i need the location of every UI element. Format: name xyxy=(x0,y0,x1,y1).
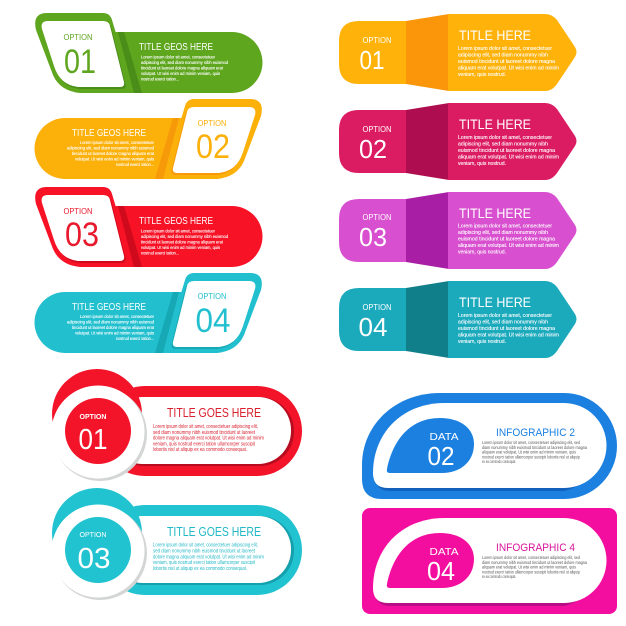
red band inner shadow xyxy=(110,397,294,466)
cyan title and text: Lorem ipsum dolor sit amet, consectetuer adipiscing elit, xyxy=(153,543,258,549)
pink body text: diam nonummy nibh euismod tincidunt ut laoreet dolore magna xyxy=(482,560,587,565)
red title and text: volutpat. Ut wisi enim ad minim veniam, quis xyxy=(141,245,221,250)
pink frame xyxy=(362,508,617,614)
blue body text: ex ea commodo consequat. xyxy=(482,459,516,464)
pink data blob: 04 xyxy=(427,556,455,586)
cyan band xyxy=(100,505,302,595)
cyan badge: OPTION xyxy=(80,530,106,539)
white option card: OPTION xyxy=(64,33,93,42)
green title and text: Lorem ipsum dolor sit amet, consectetuer xyxy=(141,54,215,60)
crimson labels xyxy=(359,116,559,167)
cyan title and text: lobortis nisl ut aliquip ex ea commodo consequat. xyxy=(153,566,247,572)
amber labels: OPTION xyxy=(362,36,392,45)
dark teal labels: TITLE HERE xyxy=(459,294,531,310)
white option card xyxy=(173,107,255,173)
blue frame xyxy=(362,393,617,499)
dark teal labels: OPTION xyxy=(362,303,392,312)
green card shadow xyxy=(43,23,126,89)
blue body text: aliquam erat volutpat. Ut wisi enim ad minim veniam, quis xyxy=(482,450,577,455)
white option card: 02 xyxy=(196,128,230,166)
pink body text: ex ea commodo consequat. xyxy=(482,574,516,579)
red card shadow xyxy=(43,197,126,263)
white text area xyxy=(110,516,291,583)
crimson labels: 02 xyxy=(359,134,387,164)
crimson labels: euismod tincidunt ut laoreet dolore magna xyxy=(458,148,555,154)
blue body text: Lorem ipsum dolor sit amet, consectetuer adipiscing elit, sed xyxy=(482,440,580,445)
dark teal labels xyxy=(358,294,559,345)
green title and text: nostrud exerci tation... xyxy=(141,76,179,82)
white ring xyxy=(52,386,144,478)
white ring xyxy=(52,504,144,598)
red title and text: Lorem ipsum dolor sit amet, consectetuer adipiscing elit, xyxy=(153,424,258,430)
magenta fold xyxy=(406,192,449,269)
teal title and text: TITLE GEOS HERE xyxy=(72,302,146,313)
cyan band inner shadow xyxy=(110,516,294,585)
green title and text: volutpat. Ut wisi enim ad minim veniam, quis xyxy=(141,71,221,76)
amber labels: adipiscing elit, sed diam nonummy nibh xyxy=(458,52,548,58)
orange body xyxy=(34,118,187,179)
cyan title and text xyxy=(153,525,264,572)
panel: data 04 pink xyxy=(362,508,617,614)
crimson labels: OPTION xyxy=(362,125,392,134)
green body xyxy=(110,32,262,93)
dark teal labels: 04 xyxy=(358,312,388,342)
magenta labels xyxy=(359,205,559,256)
cyan title and text: dolore magna aliquam erat volutpat. Ut wisi enim ad minim xyxy=(153,554,264,560)
red title and text: Lorem ipsum dolor sit amet, consectetuer xyxy=(141,228,215,234)
teal title and text xyxy=(67,302,155,341)
green tab xyxy=(35,13,134,93)
amber labels: veniam, quis nostrud. xyxy=(458,72,506,78)
red title and text: nostrud exerci tation... xyxy=(141,250,179,256)
red fold strip xyxy=(118,206,142,267)
white option card xyxy=(173,281,255,347)
white option card: OPTION xyxy=(198,292,227,301)
blue data blob: DATA xyxy=(430,431,458,443)
teal title and text: nostrud exerci tation... xyxy=(116,336,154,341)
panel: round option 01 red xyxy=(52,369,302,481)
blue body text xyxy=(482,440,587,464)
blue data blob xyxy=(387,418,474,473)
amber fold xyxy=(406,14,449,91)
orange title and text: Lorem ipsum dolor sit amet, consectetuer xyxy=(80,140,154,145)
white option card: 03 xyxy=(65,216,99,254)
orange card shadow xyxy=(171,109,254,175)
dark teal labels: Lorem ipsum dolor sit amet, consectetuer xyxy=(458,313,552,319)
cyan title and text: sed diam nonummy nibh euismod tincidunt ut laoreet xyxy=(153,548,256,554)
red badge xyxy=(65,398,131,464)
red title and text: veniam, quis nostrud exerci tation ullamcorper suscipit xyxy=(153,441,256,447)
magenta labels: adipiscing elit, sed diam nonummy nibh xyxy=(458,230,548,236)
white option card: 04 xyxy=(196,302,230,340)
orange title and text: nostrud exerci tation... xyxy=(116,162,154,167)
pink frame shadow xyxy=(375,520,599,606)
pink body text: nostrud exerci tation ullamcorper suscipit lobortis nisl ut aliquip xyxy=(482,569,580,574)
amber labels: 01 xyxy=(360,45,384,75)
crimson arrow body xyxy=(448,103,576,180)
orange title and text: adipiscing elit, sed diam nonummy nibh euismod xyxy=(67,146,154,150)
orange title and text: TITLE GEOS HERE xyxy=(72,128,146,139)
red badge: 01 xyxy=(78,424,108,456)
magenta labels: Lorem ipsum dolor sit amet, consectetuer xyxy=(458,224,552,230)
amber labels xyxy=(360,27,559,78)
panel: arrow option 04 teal xyxy=(339,281,576,358)
red title and text: tincidunt ut laoreet dolore magna aliquam erat xyxy=(141,240,224,244)
dark teal left tab xyxy=(339,288,407,351)
white content area xyxy=(373,518,606,603)
white option card xyxy=(42,195,124,261)
white text area xyxy=(110,397,291,464)
pink title: INFOGRAPHIC 4 xyxy=(496,542,575,554)
teal title and text: adipiscing elit, sed diam nonummy nibh euismod xyxy=(67,320,154,324)
pink body text: aliquam erat volutpat. Ut wisi enim ad minim veniam, quis xyxy=(482,565,577,570)
teal title and text: Lorem ipsum dolor sit amet, consectetuer xyxy=(80,314,154,319)
crimson labels: Lorem ipsum dolor sit amet, consectetuer xyxy=(458,135,552,141)
red title and text: adipiscing elit, sed diam nonummy nibh euismod xyxy=(141,234,228,239)
white content area xyxy=(373,403,606,488)
cyan title and text: TITLE GOES HERE xyxy=(167,525,261,539)
magenta arrow body xyxy=(448,192,576,269)
dark teal labels: veniam, quis nostrud. xyxy=(458,339,506,345)
crimson labels: aliquam erat volutpat. Ut wisi enim ad minim xyxy=(458,154,559,160)
teal title and text: volutpat. Ut wisi enim ad minim veniam, quis xyxy=(75,330,155,336)
panel: round option 03 cyan xyxy=(52,488,302,600)
magenta labels: 03 xyxy=(359,222,387,252)
magenta labels: aliquam erat volutpat. Ut wisi enim ad minim xyxy=(458,243,559,249)
dark teal labels: euismod tincidunt ut laoreet dolore magna xyxy=(458,326,555,332)
crimson labels: TITLE HERE xyxy=(459,116,531,132)
panel: option 02 orange xyxy=(34,99,262,179)
orange title and text: volutpat. Ut wisi enim ad minim veniam, quis xyxy=(75,156,155,162)
red title and text: dolore magna aliquam erat volutpat. Ut wisi enim ad minim xyxy=(153,436,264,442)
orange fold strip xyxy=(155,118,179,179)
orange title and text xyxy=(67,128,155,167)
pink data blob xyxy=(387,533,474,588)
teal tab xyxy=(163,273,262,353)
red band xyxy=(100,386,302,476)
blue frame shadow xyxy=(375,405,599,491)
amber labels: Lorem ipsum dolor sit amet, consectetuer xyxy=(458,46,552,52)
panel: option 03 red xyxy=(35,187,262,267)
amber left tab xyxy=(339,21,407,84)
green fold strip xyxy=(118,32,142,93)
amber arrow body xyxy=(448,14,576,91)
amber labels: aliquam erat volutpat. Ut wisi enim ad minim xyxy=(458,66,559,72)
crimson labels: veniam, quis nostrud. xyxy=(458,161,506,167)
dark teal labels: aliquam erat volutpat. Ut wisi enim ad minim xyxy=(458,332,559,338)
circle shadow xyxy=(53,506,147,600)
white option card: OPTION xyxy=(198,119,227,128)
red tab xyxy=(35,187,134,267)
crimson left tab xyxy=(339,110,407,173)
red title and text: lobortis nisl ut aliquip ex ea commodo consequat. xyxy=(153,447,247,453)
panel: arrow option 02 crimson xyxy=(339,103,576,180)
cyan badge xyxy=(65,517,131,583)
white option card: OPTION xyxy=(64,207,93,216)
red title and text: TITLE GOES HERE xyxy=(167,406,261,420)
panel: arrow option 03 magenta xyxy=(339,192,576,269)
teal card shadow xyxy=(171,283,254,349)
white option card: 01 xyxy=(64,43,96,81)
red title and text: TITLE GEOS HERE xyxy=(139,216,213,227)
orange tab xyxy=(163,99,262,179)
magenta labels: TITLE HERE xyxy=(459,205,531,221)
green title and text: adipiscing elit, sed diam nonummy nibh euismod xyxy=(141,60,228,65)
teal fold strip xyxy=(155,292,179,353)
white option card xyxy=(42,21,124,87)
dark teal arrow body xyxy=(448,281,576,358)
red crescent circle xyxy=(52,369,142,459)
cyan badge: 03 xyxy=(78,543,110,575)
magenta labels: euismod tincidunt ut laoreet dolore magna xyxy=(458,236,555,242)
green title and text: tincidunt ut laoreet dolore magna aliquam erat xyxy=(141,66,224,70)
green title and text: TITLE GEOS HERE xyxy=(139,42,213,53)
cyan title and text: veniam, quis nostrud exerci tation ullamcorper suscipit xyxy=(153,560,256,566)
pink body text: Lorem ipsum dolor sit amet, consectetuer adipiscing elit, sed xyxy=(482,555,580,560)
panel: option 04 teal xyxy=(34,273,262,353)
dark teal labels: adipiscing elit, sed diam nonummy nibh xyxy=(458,320,548,326)
red badge: OPTION xyxy=(80,412,106,421)
magenta labels: veniam, quis nostrud. xyxy=(458,250,506,256)
blue data blob: 02 xyxy=(428,441,454,471)
crimson labels: adipiscing elit, sed diam nonummy nibh xyxy=(458,142,548,148)
red title and text xyxy=(139,216,228,256)
circle shadow xyxy=(53,387,147,481)
dark teal fold xyxy=(406,281,449,358)
red body xyxy=(110,206,262,267)
orange title and text: tincidunt ut laoreet dolore magna aliquam erat xyxy=(72,151,155,156)
blue title: INFOGRAPHIC 2 xyxy=(496,427,575,439)
panel: option 01 green xyxy=(35,13,262,93)
magenta labels: OPTION xyxy=(362,213,392,222)
pink data blob: DATA xyxy=(430,546,458,558)
teal body xyxy=(34,292,187,353)
red title and text xyxy=(153,406,264,453)
blue body text: diam nonummy nibh euismod tincidunt ut laoreet dolore magna xyxy=(482,445,587,450)
crimson fold xyxy=(406,103,449,180)
red title and text: sed diam nonummy nibh euismod tincidunt ut laoreet xyxy=(153,430,256,436)
amber labels: TITLE HERE xyxy=(459,27,531,43)
green title and text xyxy=(139,42,228,82)
pink body text xyxy=(482,555,587,579)
magenta left tab xyxy=(339,199,407,262)
blue body text: nostrud exerci tation ullamcorper suscipit lobortis nisl ut aliquip xyxy=(482,454,580,459)
teal title and text: tincidunt ut laoreet dolore magna aliquam erat xyxy=(72,325,155,330)
amber labels: euismod tincidunt ut laoreet dolore magna xyxy=(458,59,555,65)
panel: data 02 blue xyxy=(362,393,617,499)
cyan crescent circle xyxy=(52,488,142,578)
panel: arrow option 01 amber xyxy=(339,14,576,91)
